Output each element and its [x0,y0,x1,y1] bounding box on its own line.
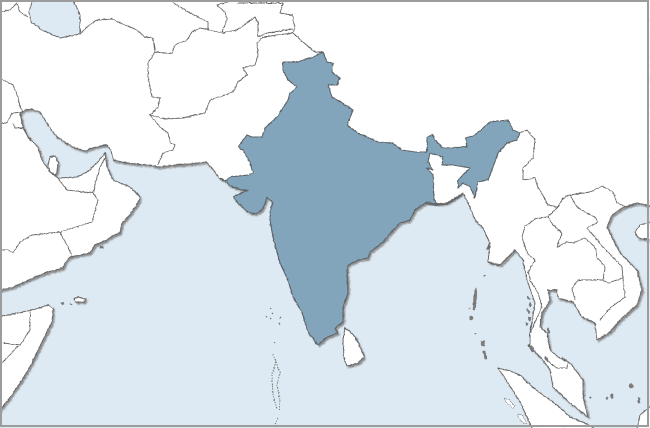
islands: Gulf of Aden [61,246,104,305]
islands: Andaman and Nicobar [469,275,487,359]
land: Qatar [48,156,58,175]
land: Sri Lanka [343,328,364,366]
land: Hainan [635,222,650,240]
islands: Maldives [272,354,280,425]
land: Socotra [74,297,86,302]
small islands [61,246,640,425]
islands: Mergui and Thai coast [526,296,550,362]
islands: Anambas and Natuna [590,384,640,403]
islands: Lakshadweep [266,308,281,343]
land: Horn of Africa [0,305,53,412]
islands: Sumatra west coast [504,398,527,424]
land: Sumatra [498,368,597,428]
India [225,52,520,345]
Ganges and Irrawaddy delta shading [425,194,533,352]
Caspian Sea [29,0,80,38]
land: Borneo [637,405,650,428]
